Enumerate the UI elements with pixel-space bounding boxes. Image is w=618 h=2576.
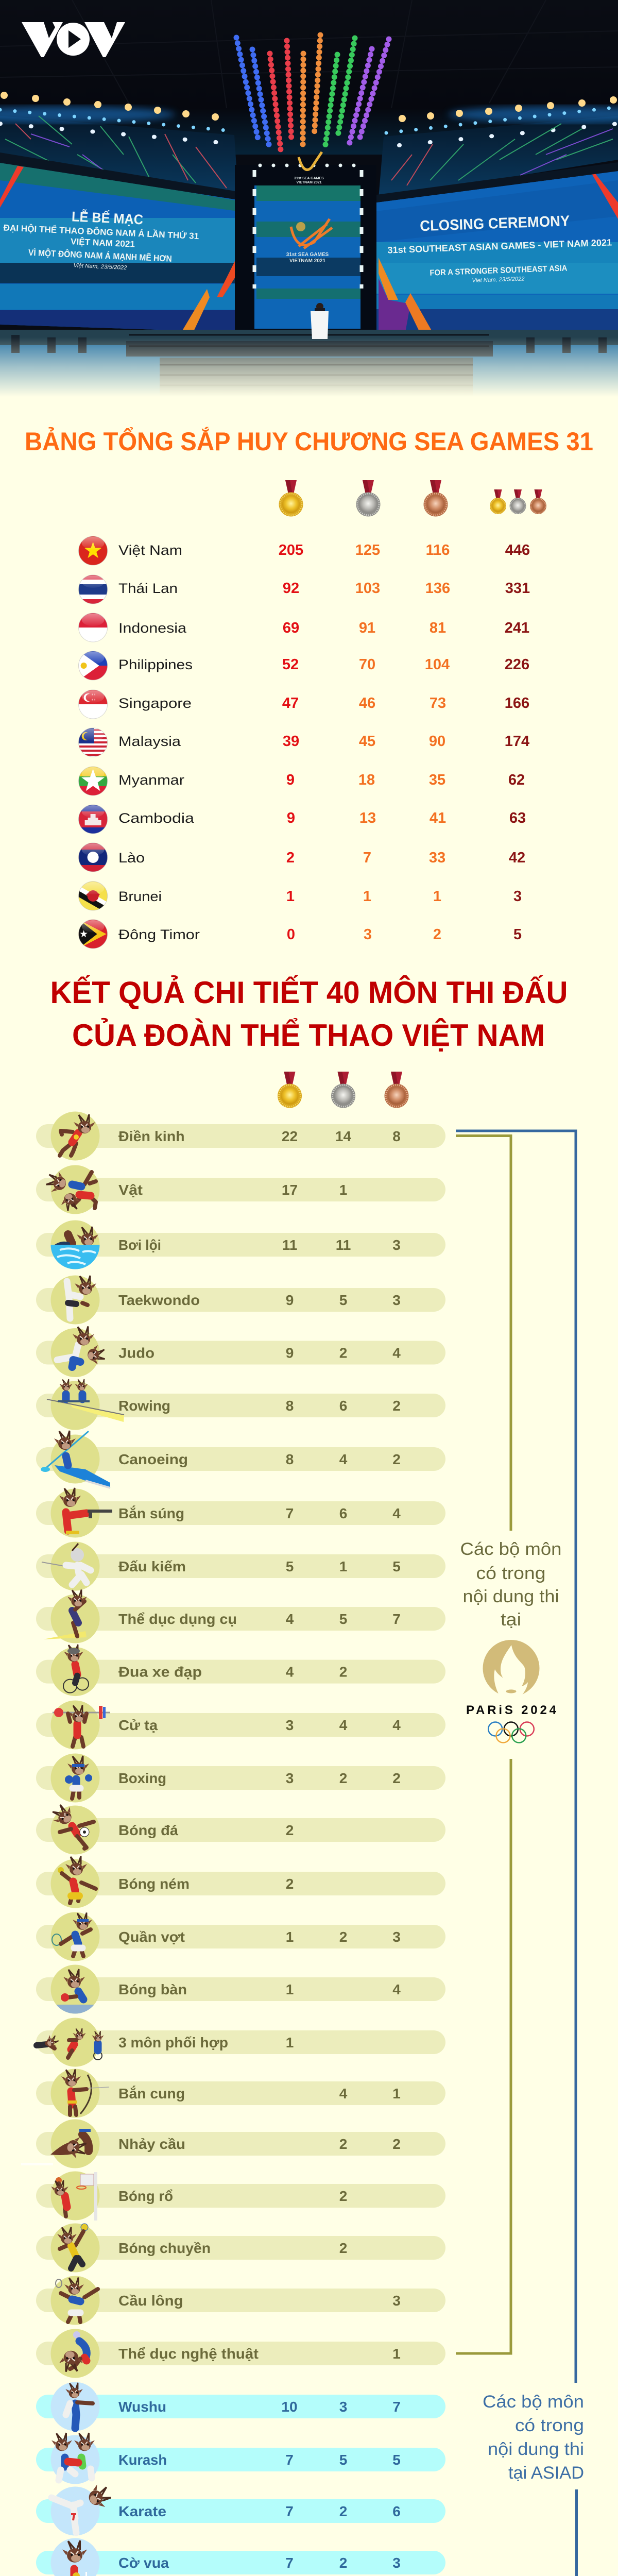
central LED tower: 31st SEA GAMES: [294, 177, 324, 180]
row: Bóng ném: Bóng ném: [118, 1876, 190, 1892]
central LED tower: 31st SEA GAMES: [286, 252, 329, 258]
row: Nhảy cầu: 2: [392, 2136, 401, 2152]
row: Malaysia: 174: [505, 733, 529, 750]
row: Philippines: 52: [282, 656, 299, 673]
row: Bắn cung: 4: [339, 2086, 348, 2102]
note: ASIAD sports: [483, 2392, 584, 2483]
row: Đông Timor: 0: [287, 926, 295, 943]
left big screen: LỄ BẾ MẠC: [72, 208, 144, 227]
podium and speaker: [311, 303, 329, 339]
row: 3 môn phối hợp: [36, 2018, 445, 2067]
note: ASIAD sports: tại ASIAD: [508, 2463, 584, 2483]
row: Taekwondo: Taekwondo: [118, 1292, 200, 1308]
row: Lào: 7: [363, 850, 371, 866]
row: Judo: Judo: [118, 1345, 154, 1361]
row: Judo: [36, 1326, 445, 1377]
row: Philippines: 70: [359, 656, 375, 673]
row: Karate: 7: [285, 2503, 294, 2519]
row: Cờ vua: 3: [392, 2555, 401, 2571]
right big screen: 31st SOUTHEAST ASIAN GAMES - VIET NAM 2021: [387, 237, 612, 256]
row: Indonesia: 81: [430, 620, 446, 636]
row: Cambodia: 9: [287, 810, 295, 826]
row: Thái Lan: 92: [283, 580, 299, 597]
row: Nhảy cầu: Nhảy cầu: [118, 2136, 185, 2152]
row: Karate: Karate: [118, 2503, 166, 2519]
row: Singapore: 46: [359, 695, 375, 711]
row: Bắn cung: Bắn cung: [118, 2086, 185, 2102]
row: Đấu kiếm: [36, 1541, 445, 1591]
hanging LED light columns: [236, 35, 389, 150]
row: Thái Lan: [79, 575, 530, 604]
row: Myanmar: 9: [286, 772, 295, 788]
row: Bóng bàn: 4: [392, 1981, 401, 1997]
row: Brunei: 1: [363, 888, 371, 905]
row: Bơi lội: 11: [282, 1237, 297, 1253]
row: Wushu: 3: [339, 2399, 347, 2415]
mascot: [43, 1590, 100, 1643]
row: Cờ vua: [36, 2538, 445, 2576]
row: Boxing: 3: [286, 1770, 294, 1786]
row: Boxing: [36, 1754, 445, 1802]
row: Nhảy cầu: [21, 2120, 445, 2168]
row: Judo: 4: [392, 1345, 401, 1361]
row: Cử tạ: Cử tạ: [118, 1717, 158, 1733]
row: Singapore: 166: [505, 695, 529, 711]
row: Singapore: [79, 690, 529, 719]
mascot: [48, 1801, 100, 1855]
note: Olympic sports: nội dung thi: [462, 1587, 559, 1606]
row: Judo: 9: [286, 1345, 294, 1361]
central LED tower: VIETNAM 2021: [289, 258, 325, 264]
left upper stand: [0, 106, 238, 198]
title: medal table: BẢNG TỔNG SẮP HUY CHƯƠNG SEA GAMES 31: [25, 427, 593, 456]
row: Philippines: 104: [425, 656, 450, 673]
row: Đua xe đạp: Đua xe đạp: [118, 1664, 202, 1680]
row: Cử tạ: [36, 1700, 445, 1750]
row: Bóng rổ: 2: [339, 2188, 347, 2204]
row: Thể dục dụng cụ: Thể dục dụng cụ: [118, 1611, 237, 1627]
row: Đua xe đạp: 2: [339, 1664, 347, 1680]
row: Quần vợt: [36, 1912, 445, 1961]
row: Điền kinh: [36, 1112, 445, 1160]
row: Thái Lan: 136: [425, 580, 450, 597]
mascot: [50, 2276, 100, 2325]
row: Bắn súng: 6: [339, 1505, 347, 1521]
row: Indonesia: [79, 613, 529, 642]
row: Việt Nam: Việt Nam: [118, 543, 182, 558]
row: Lào: 2: [286, 850, 295, 866]
row: Philippines: Philippines: [118, 657, 193, 672]
row: Cử tạ: 4: [339, 1717, 348, 1733]
right big screen: Viet Nam, 23/5/2022: [472, 276, 525, 284]
right upper stand: [379, 106, 618, 198]
row: Việt Nam: 446: [505, 542, 530, 558]
mascot: [50, 1220, 100, 1269]
row: Vật: 17: [282, 1182, 298, 1198]
row: Kurash: 5: [392, 2452, 401, 2468]
row: Wushu: Wushu: [118, 2399, 166, 2415]
bracket: Olympic group blue: [456, 1131, 576, 2383]
row: Thể dục dụng cụ: [36, 1590, 445, 1643]
row: Canoeing: 4: [339, 1451, 348, 1467]
row: Myanmar: 62: [508, 772, 525, 788]
mascot: [50, 1700, 110, 1750]
central LED tower: VIETNAM 2021: [296, 181, 322, 184]
row: Bơi lội: 11: [336, 1237, 351, 1253]
row: Lào: Lào: [118, 850, 145, 866]
row: Đấu kiếm: 5: [392, 1558, 401, 1574]
row: Quần vợt: 3: [392, 1929, 401, 1945]
row: Cử tạ: 4: [392, 1717, 401, 1733]
row: Rowing: [36, 1379, 445, 1430]
mascot: [50, 2382, 100, 2431]
row: Lào: 42: [509, 850, 525, 866]
row: Myanmar: Myanmar: [118, 772, 184, 788]
row: Cambodia: [79, 805, 526, 834]
row: Brunei: 3: [513, 888, 522, 905]
note: Olympic sports: Các bộ môn: [460, 1539, 561, 1559]
row: Judo: 2: [339, 1345, 347, 1361]
medal table rows: [78, 536, 530, 948]
hero photo: closing ceremony stage: [0, 0, 618, 413]
row: Bắn súng: 4: [392, 1505, 401, 1521]
row: Cờ vua: Cờ vua: [118, 2555, 169, 2571]
row: Karate: 2: [339, 2503, 347, 2519]
mascot: [50, 1856, 100, 1908]
row: Quần vợt: 2: [339, 1929, 347, 1945]
row: Điền kinh: 8: [392, 1128, 401, 1144]
row: Việt Nam: 125: [355, 542, 380, 558]
row: Canoeing: 2: [392, 1451, 401, 1467]
row: Cử tạ: 3: [286, 1717, 294, 1733]
row: Thái Lan: 331: [505, 580, 530, 597]
note: Olympic sports: có trong: [476, 1564, 546, 1583]
row: Indonesia: 69: [283, 620, 299, 636]
row: Thể dục nghệ thuật: 1: [392, 2346, 401, 2362]
row: Cambodia: Cambodia: [118, 810, 195, 826]
row: 3 môn phối hợp: 3 môn phối hợp: [118, 2035, 228, 2050]
blue group rows: [35, 2382, 445, 2576]
row: Bóng ném: [36, 1856, 445, 1908]
row: Kurash: 7: [285, 2452, 294, 2468]
VOV logo white: [22, 22, 125, 57]
left big screen: VÌ MỘT ĐÔNG NAM Á MẠNH MẼ HƠN: [28, 247, 172, 264]
row: Indonesia: Indonesia: [118, 620, 187, 636]
row: Rowing: 6: [339, 1398, 347, 1414]
row: Indonesia: 241: [505, 620, 529, 636]
row: Brunei: 1: [286, 888, 295, 905]
row: Karate: [36, 2482, 445, 2536]
mascot: [50, 1326, 105, 1377]
row: Malaysia: 39: [283, 733, 299, 750]
left big screen: VIỆT NAM 2021: [71, 236, 135, 249]
row: Singapore: 47: [282, 695, 299, 711]
row: Malaysia: [79, 728, 529, 757]
row: Bóng bàn: 1: [286, 1981, 294, 1997]
row: Bóng đá: Bóng đá: [118, 1822, 178, 1838]
row: Cầu lông: Cầu lông: [118, 2293, 183, 2309]
row: Canoeing: 8: [286, 1451, 294, 1467]
row: Bóng rổ: [36, 2171, 445, 2221]
row: Đông Timor: 3: [364, 926, 372, 943]
icon: Paris 2024 logo: PARiS 2024: [466, 1703, 557, 1717]
row: Điền kinh: Điền kinh: [118, 1128, 185, 1144]
row: Cambodia: 63: [509, 810, 526, 826]
right big screen: CLOSING CEREMONY: [420, 213, 570, 234]
note: Olympic sports: [460, 1539, 561, 1630]
row: Quần vợt: Quần vợt: [118, 1929, 185, 1945]
row: Bóng ném: 2: [286, 1876, 294, 1892]
note: ASIAD sports: Các bộ môn: [483, 2392, 584, 2412]
left big screen: ĐẠI HỘI THỂ THAO ĐÔNG NAM Á LẦN THỨ 31: [3, 223, 199, 241]
row: Điền kinh: 22: [282, 1128, 298, 1144]
row: Nhảy cầu: 2: [339, 2136, 347, 2152]
row: Bóng chuyền: 2: [339, 2240, 347, 2256]
note: ASIAD sports: có trong: [515, 2416, 584, 2435]
row: Cầu lông: [36, 2276, 445, 2325]
row: Cờ vua: 2: [339, 2555, 347, 2571]
row: Singapore: 73: [430, 695, 446, 711]
icon: Paris 2024 logo: [466, 1640, 557, 1742]
row: Malaysia: 45: [359, 733, 375, 750]
title: detailed results: CỦA ĐOÀN THỂ THAO VIỆT NAM: [72, 1018, 545, 1053]
mascot: [50, 2538, 100, 2576]
title: detailed results: [50, 975, 568, 1053]
row: Đấu kiếm: Đấu kiếm: [118, 1558, 186, 1574]
results header medals: [278, 1072, 409, 1108]
row: Canoeing: Canoeing: [118, 1451, 188, 1467]
bracket: Paris olive: [456, 1136, 511, 2353]
mascot: [50, 1912, 100, 1961]
row: Philippines: [78, 650, 529, 681]
row: Wushu: [36, 2382, 445, 2431]
row: Đấu kiếm: 5: [286, 1558, 294, 1574]
row: Rowing: 2: [392, 1398, 401, 1414]
mascot: [50, 1754, 100, 1802]
row: Singapore: Singapore: [118, 696, 192, 711]
title: detailed results: KẾT QUẢ CHI TIẾT 40 MÔN THI ĐẤU: [50, 975, 568, 1010]
row: Brunei: 1: [433, 888, 441, 905]
row: Brunei: [79, 882, 522, 913]
row: Đấu kiếm: 1: [339, 1558, 347, 1574]
mascot: [41, 1431, 110, 1488]
mascot: [47, 1379, 124, 1430]
row: Myanmar: 18: [358, 772, 375, 788]
row: Việt Nam: 205: [279, 542, 303, 558]
row: Thể dục dụng cụ: 5: [339, 1611, 347, 1627]
row: Wushu: 10: [281, 2399, 298, 2415]
row: Taekwondo: 3: [392, 1292, 401, 1308]
row: Thái Lan: 103: [355, 580, 380, 597]
row: Boxing: Boxing: [118, 1770, 166, 1786]
row: Bơi lội: 3: [392, 1237, 401, 1253]
left big screen: [0, 152, 242, 335]
note: Olympic sports: tại: [501, 1610, 521, 1630]
mascot: [50, 2171, 100, 2221]
row: Bóng chuyền: [36, 2224, 445, 2272]
row: Brunei: Brunei: [118, 889, 162, 904]
row: Cambodia: 13: [359, 810, 376, 826]
mascot: [50, 1112, 100, 1160]
mascot: [50, 2433, 100, 2484]
mascot: [50, 1965, 100, 2014]
mascot: [50, 2329, 100, 2378]
left big screen: Việt Nam, 23/5/2022: [73, 263, 127, 271]
row: Rowing: 8: [286, 1398, 294, 1414]
row: Bơi lội: Bơi lội: [118, 1237, 161, 1253]
row: Kurash: Kurash: [118, 2452, 167, 2468]
mascot: [50, 2069, 109, 2117]
row: Bắn súng: 7: [286, 1505, 294, 1521]
row: Bóng bàn: [36, 1965, 445, 2014]
row: Bóng đá: 2: [286, 1822, 294, 1838]
row: Wushu: 7: [392, 2399, 401, 2415]
row: Thể dục nghệ thuật: Thể dục nghệ thuật: [118, 2346, 259, 2362]
row: Boxing: 2: [339, 1770, 347, 1786]
row: Điền kinh: 14: [335, 1128, 351, 1144]
row: Lào: 33: [429, 850, 445, 866]
row: Đua xe đạp: 4: [286, 1664, 294, 1680]
mascot: [50, 1276, 100, 1324]
mascot: [21, 2120, 100, 2168]
row: Cầu lông: 3: [392, 2293, 401, 2309]
row: Bóng chuyền: Bóng chuyền: [118, 2240, 211, 2256]
mascot: [50, 2482, 113, 2536]
row: Myanmar: [79, 767, 525, 795]
row: Thể dục nghệ thuật: [36, 2329, 445, 2378]
row: Kurash: [36, 2433, 445, 2484]
row: Bơi lội: [36, 1220, 445, 1269]
row: Quần vợt: 1: [286, 1929, 294, 1945]
row: Đông Timor: [79, 920, 522, 948]
olive group rows: [21, 1112, 445, 2378]
row: Rowing: Rowing: [118, 1398, 170, 1414]
mascot: [37, 2018, 104, 2067]
row: Philippines: 226: [505, 656, 529, 673]
medal table header icons: [279, 480, 546, 516]
row: Malaysia: Malaysia: [118, 734, 181, 749]
right big screen: [376, 162, 618, 335]
row: Vật: Vật: [118, 1182, 143, 1198]
row: Việt Nam: [79, 536, 530, 565]
row: Thể dục dụng cụ: 7: [392, 1611, 401, 1627]
row: Vật: [36, 1165, 445, 1214]
row: Taekwondo: 5: [339, 1292, 347, 1308]
row: 3 môn phối hợp: 1: [286, 2035, 294, 2050]
row: Bóng bàn: Bóng bàn: [118, 1981, 187, 1997]
row: Taekwondo: 9: [286, 1292, 294, 1308]
mascot: [50, 1645, 100, 1696]
right big screen: FOR A STRONGER SOUTHEAST ASIA: [430, 264, 568, 278]
row: Myanmar: 35: [429, 772, 445, 788]
row: Kurash: 5: [339, 2452, 347, 2468]
row: Thể dục dụng cụ: 4: [286, 1611, 294, 1627]
mascot: [44, 1165, 100, 1214]
row: Bắn súng: Bắn súng: [118, 1505, 184, 1521]
row: Cờ vua: 7: [285, 2555, 294, 2571]
stage steps: [0, 330, 618, 412]
row: Indonesia: 91: [359, 620, 375, 636]
central LED tower: [235, 152, 376, 331]
warm spot lights: [1, 92, 617, 122]
row: Đua xe đạp: [36, 1645, 445, 1696]
bracket: ASIAD blue: [456, 2489, 577, 2576]
row: Boxing: 2: [392, 1770, 401, 1786]
row: Đông Timor: 2: [433, 926, 441, 943]
row: Taekwondo: [36, 1276, 445, 1324]
row: Vật: 1: [339, 1182, 347, 1198]
row: Đông Timor: 5: [513, 926, 522, 943]
row: Thái Lan: Thái Lan: [118, 581, 178, 596]
row: Malaysia: 90: [429, 733, 445, 750]
row: Cambodia: 41: [430, 810, 446, 826]
mascot: [42, 1541, 100, 1591]
row: Bắn cung: [36, 2069, 445, 2117]
note: ASIAD sports: nội dung thi: [488, 2439, 584, 2459]
row: Bóng rổ: Bóng rổ: [118, 2188, 173, 2204]
row: Canoeing: [36, 1431, 445, 1488]
row: Việt Nam: 116: [426, 542, 450, 558]
row: Karate: 6: [392, 2503, 401, 2519]
mascot: [50, 2224, 100, 2272]
row: Bắn súng: [36, 1488, 445, 1537]
row: Lào: [79, 843, 525, 872]
row: Bóng đá: [36, 1801, 445, 1855]
row: Đông Timor: Đông Timor: [118, 927, 200, 942]
row: Bắn cung: 1: [392, 2086, 401, 2102]
mascot: [50, 1488, 112, 1537]
